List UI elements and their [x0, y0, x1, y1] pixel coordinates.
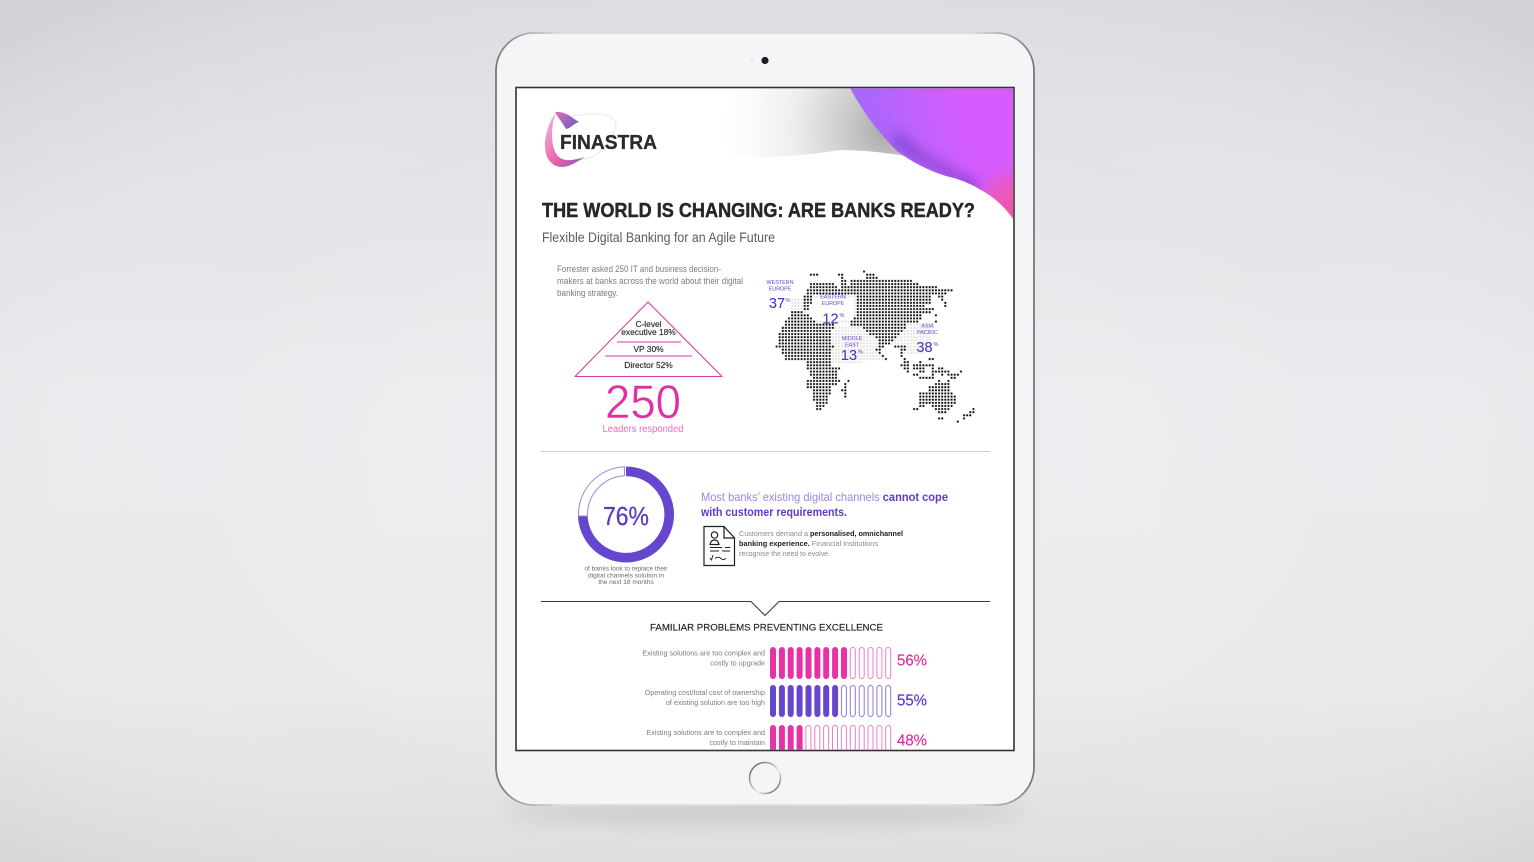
camera — [750, 57, 769, 64]
logo — [545, 112, 657, 167]
logo wordmark: FINASTRA — [560, 132, 657, 154]
callout heading: with customer requirements. — [700, 505, 847, 519]
bar row 2: Operating cost/total cost of ownership — [645, 688, 765, 697]
map label: Eastern Europe: % — [840, 313, 845, 319]
header swoosh: purple corner — [850, 88, 1020, 222]
donut caption: the next 18 months — [598, 579, 654, 586]
bar row 3: Existing solutions are to complex and — [646, 728, 765, 737]
icon: document — [704, 526, 734, 566]
logo ribbon — [545, 113, 585, 167]
map label: Western Europe: 37 — [769, 296, 785, 312]
map label: Eastern Europe — [820, 294, 846, 324]
pyramid chart: C-level — [635, 319, 662, 329]
map label: Middle East: 13 — [841, 348, 857, 364]
map label: Middle East: EAST — [845, 342, 860, 348]
intro text: banking strategy. — [557, 288, 618, 298]
callout heading — [701, 492, 948, 518]
bar row 1: costly to upgrade — [710, 658, 765, 668]
map label: Western Europe — [766, 280, 794, 308]
intro text — [557, 264, 743, 298]
map label: Western Europe: % — [786, 298, 791, 304]
callout body text: recognise the need to evolve. — [739, 549, 830, 558]
callout heading: Most banks’ existing digital channels cannot cope — [701, 490, 948, 504]
map label: Asia Pacific: % — [934, 342, 939, 348]
donut caption: digital channels solution in — [588, 572, 664, 579]
section heading: FAMILIAR PROBLEMS PREVENTING EXCELLENCE — [650, 622, 883, 634]
map label: Asia Pacific: 38 — [916, 340, 933, 356]
donut value: 76% — [603, 501, 649, 531]
callout body text: Customers demand a personalised, omnichannel — [739, 529, 903, 538]
bar row 3: 48% — [897, 732, 927, 750]
bar row 3: costly to maintain — [709, 738, 765, 747]
home button — [750, 762, 780, 794]
bar row 2: of existing solution are too high — [666, 698, 765, 707]
map label: Middle East — [842, 336, 863, 360]
logo swoosh — [555, 112, 579, 129]
map label: Middle East: % — [858, 350, 863, 356]
callout body text — [739, 529, 903, 558]
250 stat: Leaders responded — [602, 424, 684, 435]
header swoosh: grey shadow — [763, 88, 904, 156]
subtitle: Flexible Digital Banking for an Agile Future — [542, 230, 775, 245]
bar row 3 — [646, 725, 926, 750]
bar row 2: 55% — [897, 693, 927, 710]
dot map — [767, 270, 975, 423]
pyramid chart: VP 30% — [633, 344, 664, 354]
intro text: makers at banks across the world about their digital — [557, 276, 743, 286]
pyramid chart: Director 52% — [624, 360, 673, 370]
pyramid chart: executive 18% — [621, 327, 676, 337]
bar row 1: 56% — [897, 653, 927, 670]
map label: Eastern Europe: 12 — [822, 312, 839, 328]
map label: Eastern Europe: EUROPE — [822, 301, 845, 307]
map label: Asia Pacific — [916, 324, 938, 352]
map label: Middle East: MIDDLE — [842, 336, 863, 342]
250 stat: 250 — [605, 375, 681, 428]
intro text: Forrester asked 250 IT and business decision- — [557, 264, 721, 274]
map label: Western Europe: EUROPE — [769, 286, 792, 292]
screen — [516, 88, 1020, 757]
map label: Eastern Europe: EASTERN — [820, 294, 846, 300]
donut caption — [584, 566, 668, 584]
bar row 1 — [642, 647, 927, 679]
donut chart — [578, 467, 669, 586]
donut caption: of banks look to replace their — [584, 566, 668, 572]
pyramid chart — [575, 302, 722, 376]
callout body text: banking experience. Financial institutions — [739, 539, 878, 548]
tablet shadow — [503, 803, 1027, 821]
bar row 1: Existing solutions are too complex and — [642, 648, 765, 658]
map label: Western Europe: WESTERN — [767, 280, 794, 286]
map label: Asia Pacific: PACIFIC — [917, 330, 938, 336]
map label: Asia Pacific: ASIA — [921, 324, 934, 330]
title: THE WORLD IS CHANGING: ARE BANKS READY? — [542, 199, 975, 222]
bar row 2 — [645, 685, 927, 717]
tablet device — [496, 33, 1034, 806]
